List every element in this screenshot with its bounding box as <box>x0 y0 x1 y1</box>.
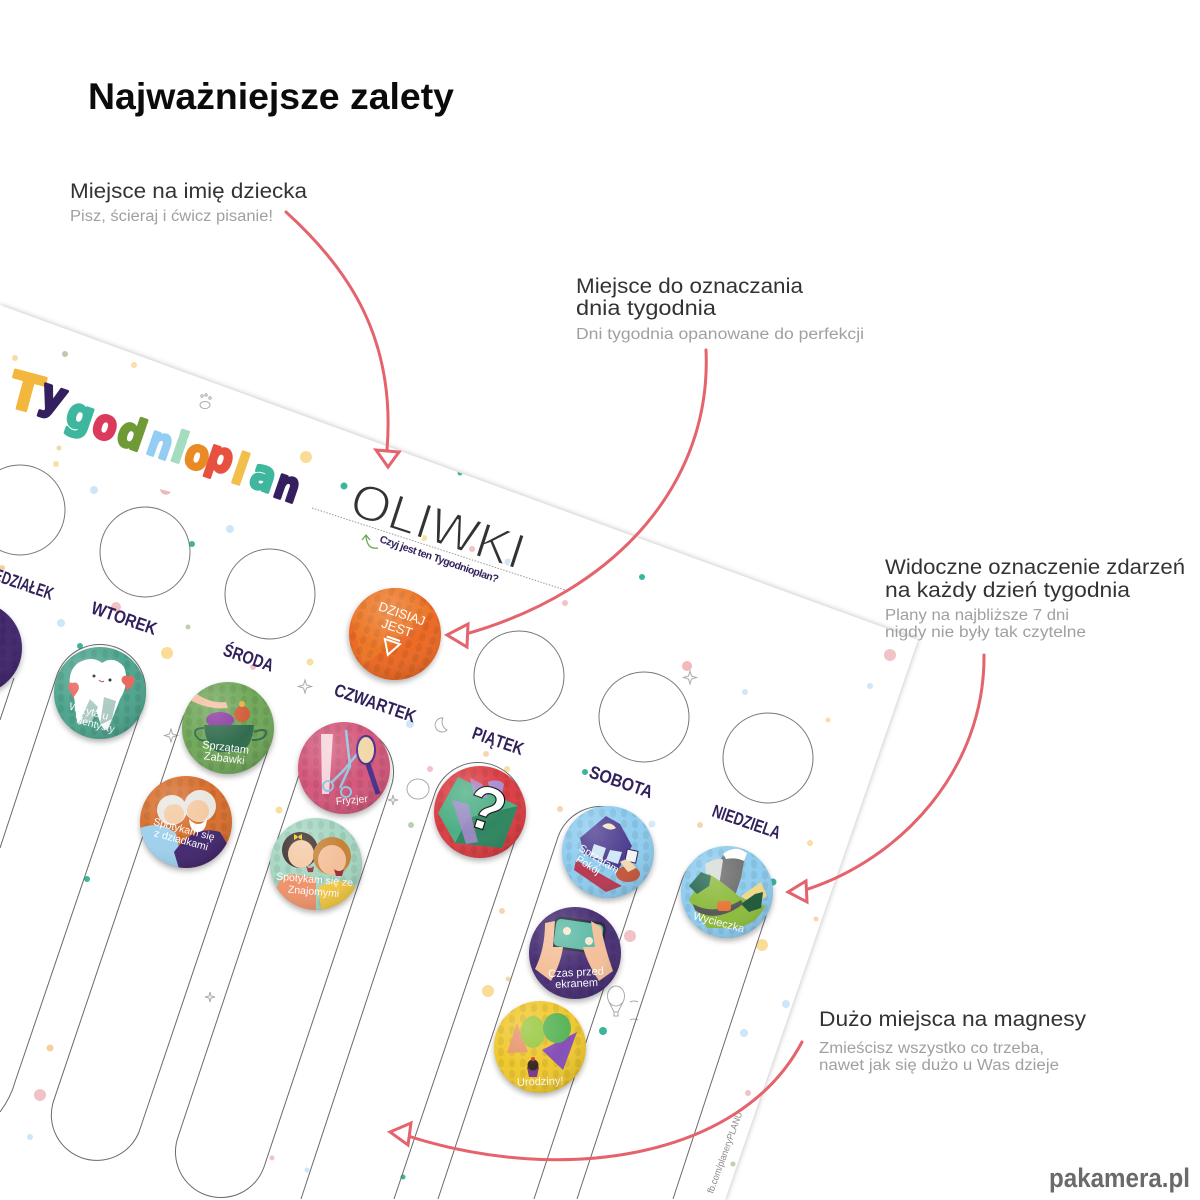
day circles <box>0 465 813 803</box>
magnet: Czas przed ekranem: Czas przed <box>548 966 604 980</box>
callout: name field <box>70 180 307 225</box>
day labels <box>0 555 783 843</box>
doodles: paw, stars, pillow, moon, balloon <box>164 394 696 1020</box>
heading: Tygodnioplan: l <box>226 445 254 495</box>
magnet: Fryzjer: Fryzjer <box>335 793 369 808</box>
magnet: Sprzątam pokój: Sprzątam <box>577 842 621 876</box>
magnet: Sprzątam zabawki: Sprzątam <box>201 739 250 757</box>
day labels: WTOREK <box>89 598 160 639</box>
callout: visible events: nigdy nie były tak czytelne <box>885 624 1086 641</box>
callout: day marker: Dni tygodnia opanowane do perfekcji <box>576 326 864 343</box>
tracks for magnets <box>0 644 771 1199</box>
heading: Tygodnioplan: o <box>86 398 125 453</box>
magnet: Sprzątam pokój <box>562 806 654 901</box>
arrow: name field <box>286 212 399 467</box>
callout: visible events: Widoczne oznaczenie zdarzeń <box>885 556 1185 579</box>
callout: visible events: Plany na najbliższe 7 dni <box>885 607 1069 624</box>
callout: name field: Pisz, ścieraj i ćwicz pisanie! <box>70 208 273 225</box>
arrow: day marker <box>447 350 706 647</box>
magnet: Wizyta u dentysty: dentysty <box>75 714 117 736</box>
magnet: Wizyta u dentysty <box>54 647 146 742</box>
callout: day marker: dnia tygodnia <box>576 297 716 320</box>
magnet: Wycieczka: Wycieczka <box>692 910 746 936</box>
day labels: CZWARTEK <box>332 680 419 726</box>
heading: Tygodnioplan <box>12 368 299 504</box>
callout: visible events: na każdy dzień tygodnia <box>885 579 1130 602</box>
heading: Tygodnioplan: y <box>34 370 73 423</box>
callout: room for magnets: nawet jak się dużo u Was dzieje <box>819 1057 1059 1074</box>
name field: OLIWKI: OLIWKI <box>344 471 532 580</box>
callout: room for magnets: Dużo miejsca na magnesy <box>819 1008 1087 1031</box>
magnet: Sprzątam pokój: Pokój <box>574 853 602 877</box>
heading: Tygodnioplan: g <box>60 388 101 443</box>
magnet: Wizyta u dentysty: Wizyta u <box>68 701 110 723</box>
magnet: Spotykam się ze znajomymi: Znajomymi <box>287 884 340 900</box>
heading: Tygodnioplan: p <box>201 431 240 485</box>
footer URL on sheet: fb.com/planeryPLANU <box>705 1110 745 1195</box>
magnet: Sprzątam zabawki: Zabawki <box>203 750 245 767</box>
magnet: Czas przed ekranem <box>529 907 621 1002</box>
confetti dots <box>0 351 896 1180</box>
magnet: Urodziny <box>494 1001 586 1096</box>
panel: weekly planner sheet <box>0 305 918 1200</box>
magnet: Sprzątam zabawki <box>182 682 274 777</box>
day labels: NIEDZIELA <box>710 801 783 843</box>
callout: day marker: Miejsce do oznaczania <box>576 275 803 298</box>
arrow: visible events <box>788 655 984 902</box>
magnet: question mark gift: ? <box>457 771 515 848</box>
heading: Tygodnioplan: n <box>142 416 180 470</box>
heading: Tygodnioplan: n <box>269 459 307 513</box>
magnet: Urodziny: Urodziny! <box>517 1075 564 1089</box>
callout: room for magnets: Zmieścisz wszystko co trzeba, <box>819 1040 1044 1057</box>
title: Najważniejsze zalety <box>88 76 454 117</box>
magnet: question mark gift <box>434 766 526 861</box>
magnet: Spotykam się z dziadkami <box>140 776 232 872</box>
arrow: room for magnets <box>390 1042 802 1160</box>
callout: day marker <box>576 275 864 343</box>
magnet: Spotykam się z dziadkami: z dziadkami <box>153 827 209 853</box>
callout: visible events <box>885 556 1185 641</box>
day labels: PIĄTEK <box>470 723 526 759</box>
magnet: Czas przed ekranem: ekranem <box>555 977 598 991</box>
magnet: Dzisiaj jest: JEST <box>380 616 415 640</box>
magnet: Fryzjer <box>298 722 390 817</box>
callout: room for magnets <box>819 1008 1087 1074</box>
magnet: Spotykam się ze znajomymi: Spotykam się ze <box>276 871 354 889</box>
heading: Tygodnioplan: a <box>244 450 283 503</box>
name field: OLIWKI: Czyj jest ten Tygodnioplan? <box>378 533 500 586</box>
magnet: Dzisiaj jest <box>344 588 444 686</box>
magnet: Spotykam się ze znajomymi <box>270 818 362 914</box>
heading: Tygodnioplan: o <box>178 428 217 483</box>
magnet: Monday <box>0 602 22 697</box>
heading: Tygodnioplan: d <box>111 407 152 462</box>
callout: name field: Miejsce na imię dziecka <box>70 180 307 203</box>
magnet: Dzisiaj jest: DZISIAJ <box>377 599 427 629</box>
heading: Tygodnioplan: i <box>166 423 194 473</box>
magnet: Spotykam się z dziadkami: Spotykam się <box>152 816 216 844</box>
name field: OLIWKI <box>312 486 565 590</box>
day labels: SOBOTA <box>587 762 656 802</box>
heading: Tygodnioplan: T <box>3 362 49 425</box>
day labels: ŚRODA <box>221 639 277 676</box>
magnet: Wycieczka <box>681 846 773 941</box>
